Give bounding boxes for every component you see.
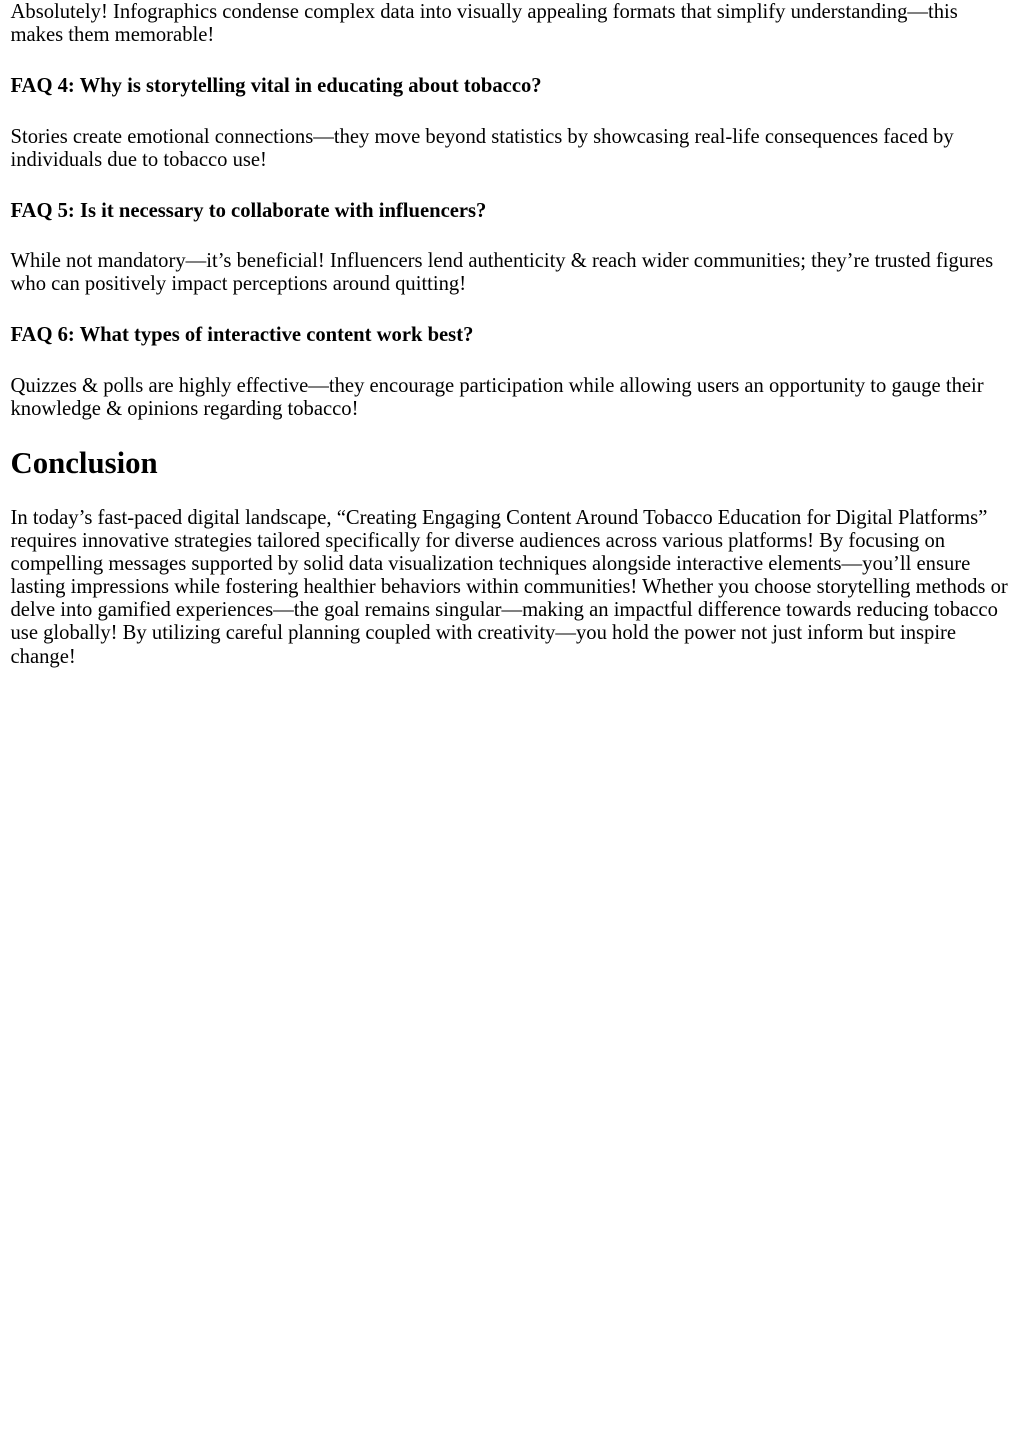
text block: FAQ 5 answer (10, 250, 993, 295)
text block: conclusion paragraph: In today’s fast-paced digital landscape, “Creating Engaging Content Around Tobacco Education for Digital Platforms” (10, 507, 987, 529)
text block: conclusion paragraph: delve into gamified experiences—the goal remains singular—making an impactful difference towards reducing tobacco (10, 599, 998, 621)
text block: FAQ 5 answer: who can positively impact perceptions around quitting! (10, 273, 466, 295)
text block: conclusion paragraph: use globally! By utilizing careful planning coupled with creativity—you hold the power not just inform but inspire (10, 622, 956, 644)
text block: FAQ 4 answer: individuals due to tobacco use! (10, 149, 267, 171)
text block: FAQ 3 answer (10, 1, 958, 46)
text block: FAQ 5 answer: While not mandatory—it’s beneficial! Influencers lend authenticity & reach wider communities; they’re trusted figures (10, 250, 993, 272)
text block: FAQ 3 answer: makes them memorable! (10, 24, 214, 46)
text block: FAQ 3 answer: Absolutely! Infographics condense complex data into visually appealing formats that simplify understanding—this (10, 1, 958, 23)
text block: conclusion paragraph: requires innovative strategies tailored specifically for diverse audiences across various platforms! By focusing on (10, 530, 945, 552)
text block: conclusion paragraph (10, 507, 1008, 668)
text block: conclusion paragraph: change! (10, 646, 76, 668)
text block: conclusion paragraph: lasting impressions while fostering healthier behaviors within communities! Whether you choose storytelling methods or (10, 576, 1008, 598)
text block: FAQ 6 answer: Quizzes & polls are highly effective—they encourage participation while allowing users an opportunity to gauge their (10, 375, 984, 397)
text block: FAQ 6 answer: knowledge & opinions regarding tobacco! (10, 398, 358, 420)
text block: FAQ 4 answer (10, 126, 954, 171)
text block: FAQ 4 answer: Stories create emotional connections—they move beyond statistics by showcasing real-life consequences faced by (10, 126, 954, 148)
text block: conclusion paragraph: compelling messages supported by solid data visualization techniques alongside interactive elements—you’ll ensure (10, 553, 970, 575)
heading: Conclusion: Conclusion (10, 446, 158, 480)
heading: FAQ 4: FAQ 4: Why is storytelling vital in educating about tobacco? (10, 75, 542, 97)
heading: FAQ 6: FAQ 6: What types of interactive content work best? (10, 324, 473, 346)
text block: FAQ 6 answer (10, 375, 984, 420)
heading: FAQ 5: FAQ 5: Is it necessary to collaborate with influencers? (10, 200, 486, 222)
